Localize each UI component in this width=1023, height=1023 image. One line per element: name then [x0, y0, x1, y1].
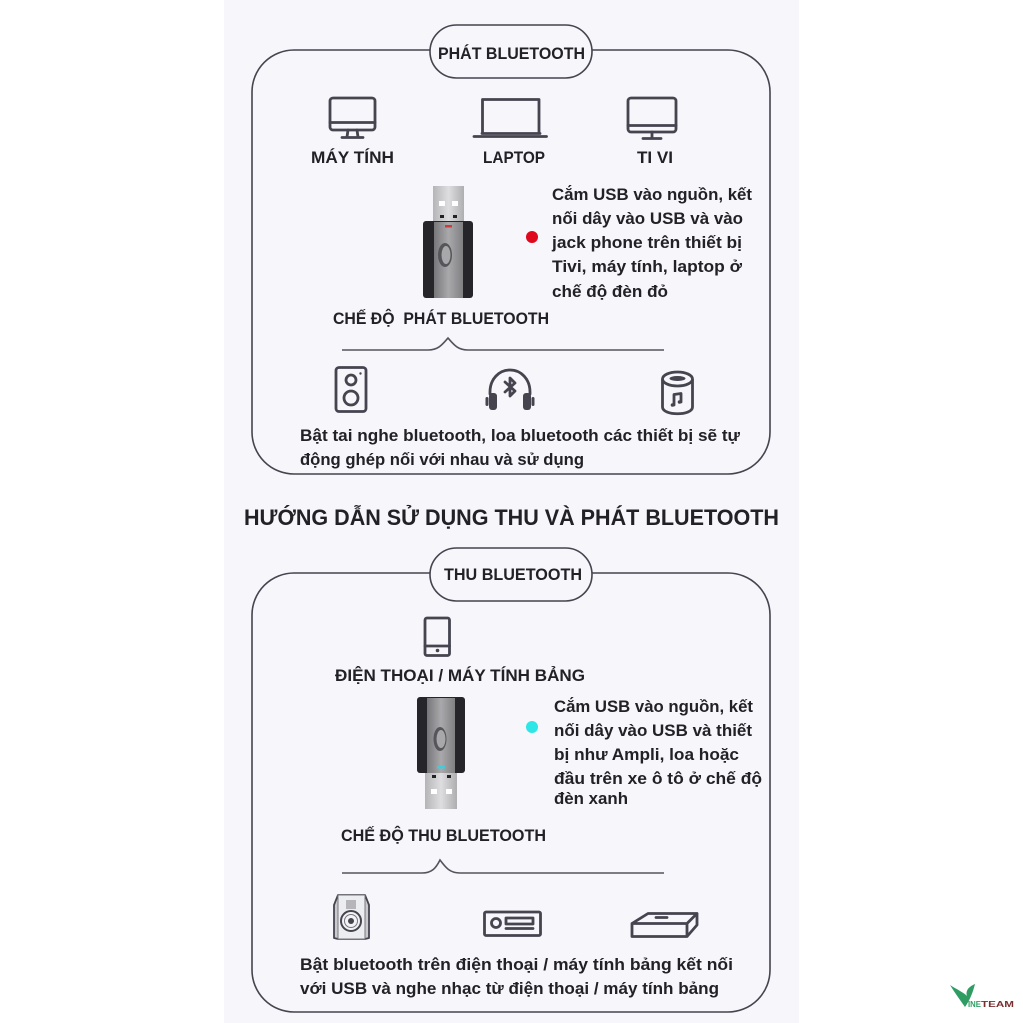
heading pill: phát bluetooth: PHÁT BLUETOOTH	[438, 44, 585, 63]
instructions: blue mode: bị như Ampli, loa hoặc	[554, 745, 739, 764]
instructions: red mode: nối dây vào USB và vào	[552, 209, 743, 228]
icon: music speaker	[662, 372, 692, 414]
text: blue mode usage: Bật bluetooth trên điện thoại / máy tính bảng kết nối	[300, 955, 733, 974]
text: blue mode usage: với USB và nghe nhạc từ điện thoại / máy tính bảng	[300, 979, 719, 998]
instructions: red mode: chế độ đèn đỏ	[552, 282, 668, 301]
icon: amplifier	[484, 912, 540, 936]
panel: phát bluetooth	[252, 25, 770, 474]
text: red mode usage	[300, 426, 741, 469]
instructions: blue mode: đèn xanh	[554, 789, 628, 808]
icon: phone	[425, 618, 450, 656]
heading pill: thu bluetooth: THU BLUETOOTH	[444, 565, 582, 584]
instructions: red mode: Tivi, máy tính, laptop ở	[552, 257, 743, 276]
instructions: blue mode	[554, 697, 762, 808]
text: blue mode usage	[300, 955, 733, 998]
icon: hifi speaker	[334, 895, 369, 939]
background panel	[224, 0, 799, 1023]
instructions: blue mode: nối dây vào USB và thiết	[554, 721, 752, 740]
brace	[342, 338, 664, 350]
usb dongle: red mode	[423, 186, 473, 298]
icon: tv	[628, 98, 676, 138]
heading pill: phát bluetooth	[430, 25, 592, 78]
title: HƯỚNG DẪN SỬ DỤNG THU VÀ PHÁT BLUETOOTH	[244, 504, 779, 530]
label: chế độ thu: CHẾ ĐỘ THU BLUETOOTH	[341, 826, 546, 845]
label: ti vi: TI VI	[637, 148, 673, 167]
logo: vineteam: TEAM	[981, 1000, 1014, 1009]
label: máy tính: MÁY TÍNH	[311, 148, 394, 167]
panel: thu bluetooth	[252, 548, 770, 1012]
icon: laptop	[474, 100, 546, 136]
label: laptop: LAPTOP	[483, 148, 545, 167]
icon: car head unit box	[632, 914, 697, 936]
instructions: red mode	[551, 185, 752, 301]
instructions: red mode: Cắm USB vào nguồn, kết	[552, 185, 752, 204]
text: red mode usage: Bật tai nghe bluetooth, loa bluetooth các thiết bị sẽ tự	[300, 426, 741, 445]
label: điện thoại: ĐIỆN THOẠI / MÁY TÍNH BẢNG	[335, 666, 585, 685]
usb dongle: blue mode	[417, 697, 465, 809]
instructions: blue mode: Cắm USB vào nguồn, kết	[554, 697, 753, 716]
icon: computer	[330, 98, 375, 138]
indicator: red light	[526, 231, 538, 243]
brace	[342, 860, 664, 873]
heading pill: thu bluetooth	[430, 548, 592, 601]
icon: bluetooth headphones	[486, 370, 534, 410]
indicator: cyan light	[526, 721, 538, 733]
instructions: red mode: jack phone trên thiết bị	[551, 233, 742, 252]
logo: vineteam: INE	[968, 1000, 982, 1009]
logo: vineteam	[950, 984, 1014, 1009]
instructions: blue mode: đầu trên xe ô tô ở chế độ	[554, 769, 762, 788]
icon: speaker	[336, 368, 366, 412]
label: chế độ phát: CHẾ ĐỘ PHÁT BLUETOOTH	[333, 309, 549, 328]
text: red mode usage: động ghép nối với nhau và sử dụng	[300, 450, 584, 469]
